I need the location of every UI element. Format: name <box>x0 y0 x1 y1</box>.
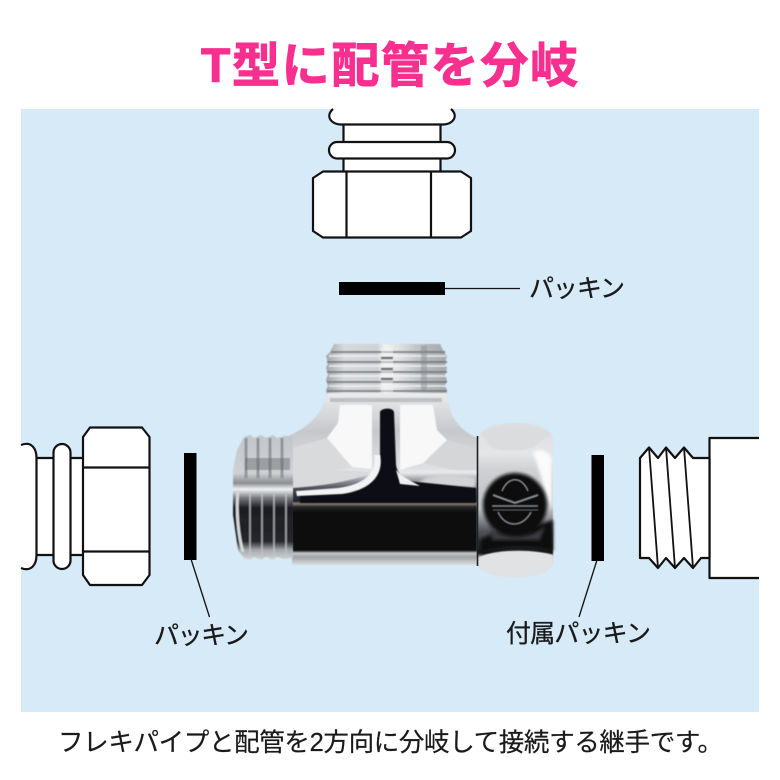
main cylinder <box>292 470 477 565</box>
left gasket with leader line <box>184 453 210 617</box>
caption: フレキパイプと配管を2方向に分岐して接続する継手です。 <box>58 729 723 757</box>
nut <box>477 423 553 577</box>
branch shoulder <box>284 393 477 478</box>
label: attached gasket: 付属パッキン <box>506 620 651 648</box>
label: top gasket: パッキン <box>529 275 625 303</box>
top thread <box>326 344 447 396</box>
label: left gasket: パッキン <box>154 622 249 650</box>
stem reflection <box>300 409 476 503</box>
cylinder upper light zone <box>292 466 372 488</box>
maker logo on nut <box>483 473 547 540</box>
shoulder facets <box>292 398 477 478</box>
top flexible pipe fitting <box>313 109 471 238</box>
top gasket with leader line <box>339 282 520 295</box>
right threaded pipe <box>640 438 759 578</box>
chrome T-fitting <box>233 344 553 577</box>
title: T型に配管を分岐 <box>201 40 578 93</box>
right gasket with leader line <box>579 455 604 617</box>
left thread <box>233 435 293 560</box>
panel: light blue background <box>21 109 759 712</box>
left flexible pipe fitting <box>21 428 150 585</box>
